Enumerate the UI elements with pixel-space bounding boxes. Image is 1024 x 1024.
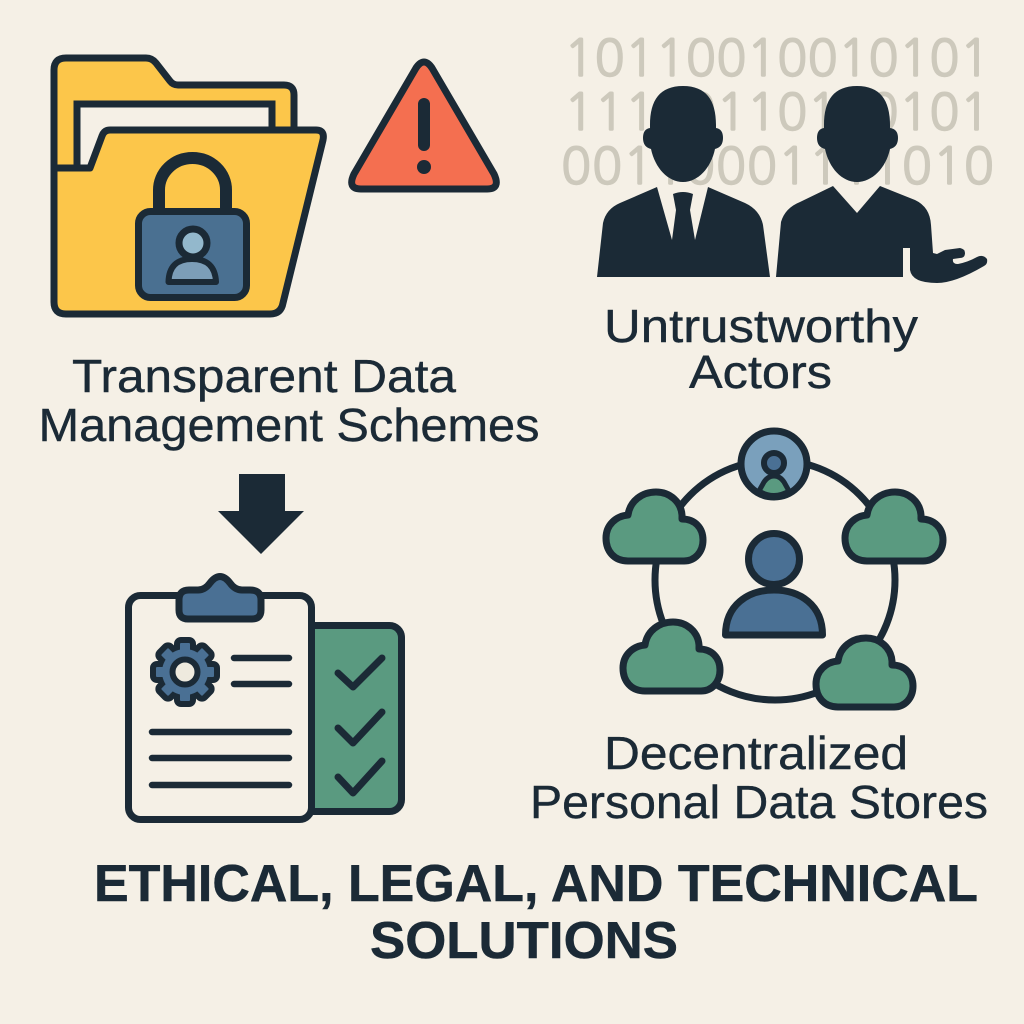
figure: left actor in suit [597,86,770,277]
node: top person [741,431,807,497]
central person [726,534,822,635]
label: Transparent Data Management Schemes [38,350,540,451]
label: Untrustworthy Actors: Actors [689,346,832,398]
icon: locked folder [54,58,323,314]
label: Decentralized Personal Data Stores [530,727,988,828]
arrow: down [218,474,304,554]
icon: warning triangle [352,62,496,189]
text lines [152,658,289,785]
title: ETHICAL, LEGAL, AND TECHNICAL [94,855,978,913]
ring connector [655,460,895,700]
binary background [561,34,994,192]
binary background: 00110001111010 [561,142,994,192]
cloud: upper left [606,492,703,561]
icon: clipboard document [128,576,312,820]
cloud: lower left [623,622,720,691]
label: Untrustworthy Actors: Untrustworthy [604,300,918,352]
label: Decentralized Personal Data Stores: Personal Data Stores [530,776,988,828]
icon: untrustworthy actors [597,86,987,283]
label: Transparent Data Management Schemes: Management Schemes [38,399,540,451]
clipboard clip [179,576,261,619]
label: Untrustworthy Actors [604,300,918,398]
cloud: upper right [845,492,943,561]
figure: right actor with open hand [776,86,987,283]
icon: decentralized network [606,431,943,707]
label: Transparent Data Management Schemes: Transparent Data [72,350,456,402]
gear icon [153,640,217,704]
title [94,855,978,970]
binary background: 11100110100101 [564,88,990,138]
title: SOLUTIONS [370,912,678,970]
icon: checklist panel [295,626,402,812]
binary background: 10110010010101 [564,34,990,84]
cloud: lower right [816,638,913,707]
label: Decentralized Personal Data Stores: Decentralized [604,727,908,779]
